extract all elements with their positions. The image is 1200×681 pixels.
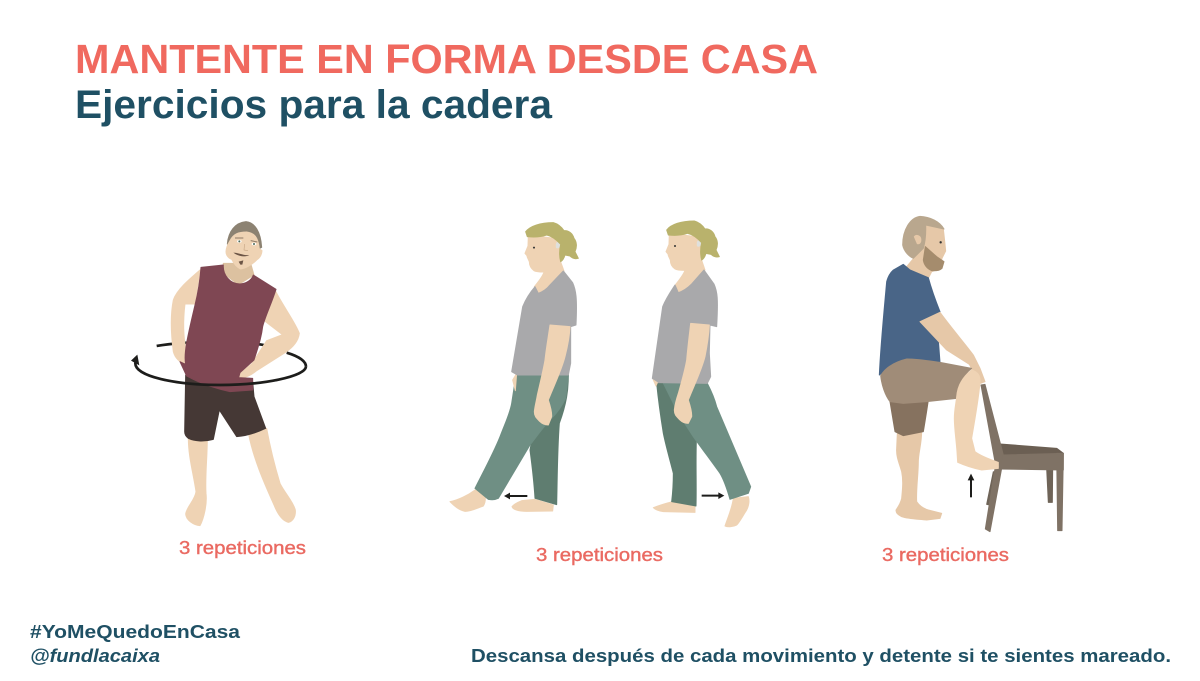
arm [534, 325, 570, 425]
footer note: Descansa después de cada movimiento y detente si te sientes mareado. [471, 645, 1171, 666]
front foot [725, 497, 749, 527]
front foot [450, 490, 485, 511]
subtitle: Ejercicios para la cadera [75, 83, 553, 127]
front shorts [881, 359, 972, 403]
label: 3 repeticiones 1: 3 repeticiones [179, 538, 306, 558]
label: 3 repeticiones 3: 3 repeticiones [882, 545, 1009, 565]
ear [556, 242, 561, 248]
arrow right [702, 492, 724, 499]
hair [227, 222, 262, 249]
figure: man rotating hips [131, 222, 306, 526]
back leg [657, 383, 697, 506]
facial features [233, 238, 257, 265]
hoop arrow: back arc [157, 342, 306, 367]
back shorts [890, 400, 928, 436]
hair [526, 223, 578, 262]
standing leg [896, 432, 942, 520]
back foot [653, 502, 695, 512]
figure: man raising knee with chair [879, 216, 1063, 532]
right leg [248, 428, 295, 522]
face [226, 232, 262, 269]
eye [939, 241, 942, 243]
head and neck [666, 233, 705, 293]
arrow up [968, 474, 974, 497]
small hand [653, 380, 657, 386]
arm [920, 312, 985, 383]
label: 3 repeticiones 2: 3 repeticiones [536, 545, 663, 565]
ear [697, 241, 702, 246]
social handle: @fundlacaixa [30, 645, 160, 666]
eye [533, 247, 535, 249]
shorts [185, 375, 266, 441]
right arm [239, 290, 299, 378]
ear [914, 235, 921, 244]
shirt [512, 271, 577, 375]
figure: woman moving leg forward [450, 223, 578, 511]
neck [223, 263, 254, 285]
neck and face [907, 224, 946, 278]
shirt [180, 265, 276, 392]
small hand [513, 373, 517, 391]
back foot [512, 499, 553, 511]
shirt [652, 270, 717, 383]
hair [903, 216, 944, 258]
left leg [186, 438, 207, 526]
arm [674, 323, 709, 423]
shirt [879, 264, 940, 375]
front leg [663, 383, 751, 499]
eye [674, 245, 676, 247]
left arm [171, 270, 200, 364]
raised leg [954, 370, 998, 470]
hair [667, 221, 719, 260]
front leg [475, 375, 568, 500]
back leg [530, 375, 568, 505]
title: MANTENTE EN FORMA DESDE CASA [75, 36, 818, 82]
figure: woman moving leg backward [652, 221, 751, 527]
hoop arrow: front arc [135, 363, 306, 385]
arrow left [504, 493, 527, 499]
chair [981, 384, 1063, 532]
hashtag: #YoMeQuedoEnCasa [30, 621, 241, 642]
arrow head [131, 355, 139, 365]
beard [923, 247, 944, 271]
head and neck [525, 235, 564, 293]
